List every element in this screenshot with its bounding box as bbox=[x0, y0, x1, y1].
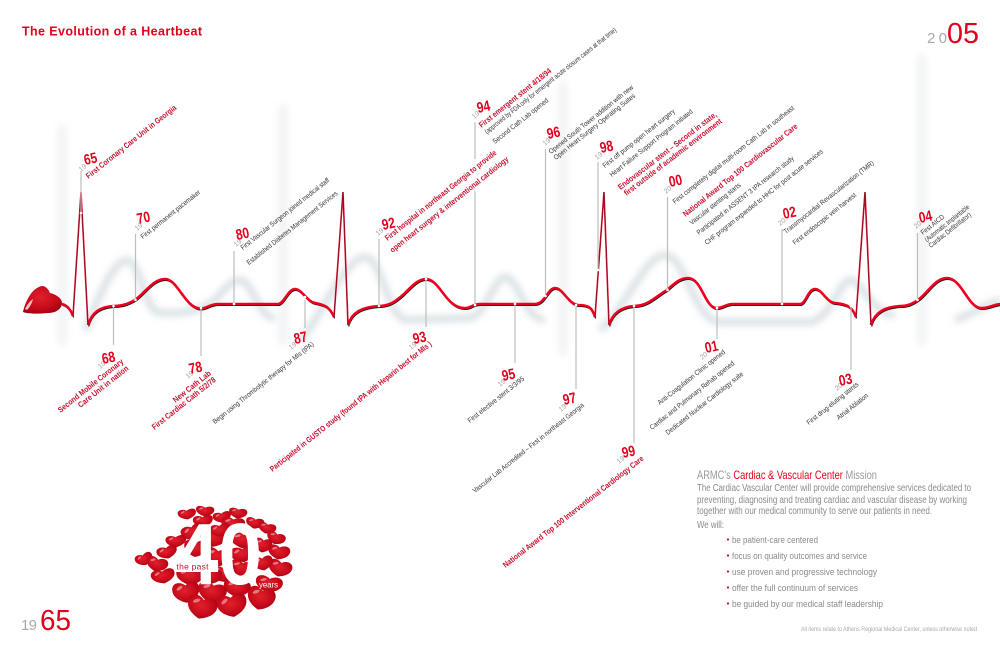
milestone 2000: Participated in ASSENT 3 tPA research study bbox=[696, 155, 796, 237]
milestone 2001: Anti-Coagulation Clinic opened bbox=[657, 349, 727, 407]
milestone 2003: 20 bbox=[834, 382, 844, 393]
milestone 1995: First elective stent 3/3/95 bbox=[467, 376, 526, 425]
milestone 1980: Established Diabetes Management Services bbox=[246, 190, 340, 267]
years label: years bbox=[259, 580, 278, 590]
milestone 1997: Vascular Lab Accredited – First in northeast Georgia bbox=[472, 402, 586, 495]
milestone 1995: 95 bbox=[500, 365, 517, 384]
milestone 1999: 19 bbox=[616, 455, 626, 466]
milestone 2004: (Automatic Implantable bbox=[924, 204, 971, 244]
milestone 1998: 19 bbox=[594, 151, 604, 162]
title: The Evolution of a Heartbeat bbox=[22, 24, 203, 38]
milestone 1999: 99 bbox=[620, 442, 637, 461]
milestone 1978: New Cath Lab bbox=[171, 369, 213, 405]
milestone 2001: Cardiac and Pulmonary Rehab opened bbox=[649, 360, 736, 432]
milestone 1993: 19 bbox=[408, 341, 418, 352]
milestone 2000: National Award Top 100 Cardiovascular Care bbox=[681, 122, 800, 219]
milestone 1994: First emergent stent 4/18/94 bbox=[477, 66, 554, 130]
commitments list: be patient-care centered bbox=[732, 535, 818, 546]
milestone 2000: Vascular stenting starts bbox=[689, 182, 743, 227]
milestone 2004: Cardiac Defibrillator) bbox=[928, 212, 973, 250]
milestone 1965: First Coronary Care Unit in Georgia bbox=[84, 103, 179, 181]
milestone 1994: (approved by FDA only for emergent acute closure cases at that time) bbox=[484, 27, 618, 136]
milestone 1994: Second Cath Lab opened bbox=[492, 97, 550, 146]
milestone 2003 bbox=[806, 306, 870, 427]
commitments list: focus on quality outcomes and service bbox=[732, 551, 867, 562]
milestone 1970: First permanent pacemaker bbox=[140, 189, 203, 241]
milestone 1994 bbox=[471, 27, 618, 304]
milestone 2004: First AICD bbox=[920, 214, 946, 237]
commitments list: offer the full continuum of services bbox=[732, 583, 858, 594]
milestone 1968: Care Unit in nation bbox=[76, 364, 130, 410]
milestone 2001: 20 bbox=[699, 351, 709, 362]
milestone 1970: 19 bbox=[134, 222, 144, 233]
milestone 1992: First hospital in northeast Georgia to provide bbox=[383, 148, 499, 243]
milestone 2003: Atrial Ablation bbox=[836, 393, 870, 422]
end year 2005 bbox=[927, 18, 979, 50]
milestone 2002: 02 bbox=[781, 203, 798, 222]
start year 1965: 65 bbox=[40, 605, 71, 637]
mission statement: together with our medical community to serve our patients in need. bbox=[697, 506, 932, 517]
milestone 2004 bbox=[913, 204, 973, 300]
milestone 2000: CHF program expanded to HHC for post acute services bbox=[704, 148, 825, 247]
milestone 2000: 20 bbox=[663, 185, 673, 196]
milestone 1987: Begin using Thrombolytic therapy for MIs (tPA) bbox=[212, 341, 316, 426]
milestone 2004: 20 bbox=[913, 220, 923, 231]
milestone 1987: 19 bbox=[288, 341, 298, 352]
mission panel bbox=[697, 468, 971, 610]
end year 2005: 05 bbox=[947, 18, 979, 50]
milestone 1996: Open Heart Surgery Operating Suites bbox=[553, 92, 637, 162]
number 40: 40 bbox=[175, 506, 262, 603]
milestone 1995 bbox=[467, 304, 526, 425]
milestone 1998: First off pump open heart surgery bbox=[602, 108, 677, 170]
milestone 1980: 80 bbox=[234, 224, 251, 243]
milestone 1993: Participated in GUSTO study (found tPA with Heparin best for MIs ) bbox=[268, 339, 434, 474]
milestone 1980: 19 bbox=[233, 238, 243, 249]
graphic: the past 40 years hearts cluster bbox=[134, 505, 294, 622]
milestone 1993: 93 bbox=[411, 328, 428, 347]
milestone 2001: 01 bbox=[703, 337, 720, 356]
mission statement bbox=[697, 483, 971, 531]
milestone 1992: 19 bbox=[375, 227, 385, 238]
start year 1965: 19 bbox=[21, 617, 37, 634]
milestone 1992: open heart surgery & interventional cardiology bbox=[388, 154, 511, 255]
milestone 2001: Dedicated Nuclear Cardiology suite bbox=[665, 371, 745, 437]
milestone 1970 bbox=[134, 189, 203, 300]
milestone 1997: 19 bbox=[558, 403, 568, 414]
milestone 1968: Second Mobile Coronary bbox=[56, 357, 126, 415]
milestone 1994: 94 bbox=[475, 97, 492, 116]
milestone 1978: 19 bbox=[185, 370, 195, 381]
milestone 1978: First Cardiac Cath 5/2/78 bbox=[150, 375, 218, 432]
milestone 2004: 04 bbox=[917, 207, 934, 226]
commitments list: be guided by our medical staff leadership bbox=[732, 599, 883, 610]
milestone 1997: 97 bbox=[561, 389, 578, 408]
milestone 1970: 70 bbox=[135, 208, 152, 227]
milestone 2000: 00 bbox=[667, 171, 684, 190]
mission heading: ARMC's Cardiac & Vascular Center Mission bbox=[697, 468, 877, 482]
milestone 1965 bbox=[78, 103, 179, 212]
milestone 2000: First completely digital multi-room Cath Lab in southeast bbox=[672, 105, 796, 206]
milestone 1998: Heart Failure Support Program initiated bbox=[609, 108, 695, 179]
milestone 1987: 87 bbox=[292, 328, 309, 347]
milestone 1980: First Vascular Surgeon joined medical staff bbox=[240, 177, 331, 252]
commitments list bbox=[727, 535, 883, 610]
milestone 1999 bbox=[501, 306, 646, 570]
milestone 2002: First endoscopic vein harvest bbox=[792, 192, 858, 247]
milestone 1995: 19 bbox=[497, 378, 507, 389]
milestone 1998: Endovascular stent – Second in state, bbox=[616, 110, 719, 192]
milestone 1992 bbox=[375, 148, 511, 306]
milestone 1987 bbox=[212, 300, 316, 426]
milestone 1980 bbox=[233, 177, 340, 304]
milestone 2000 bbox=[663, 105, 825, 290]
background ghost heartbeat bbox=[62, 55, 1000, 355]
milestone 2002: 20 bbox=[777, 217, 787, 228]
junction dots on the line bbox=[80, 212, 919, 309]
milestone 2002 bbox=[777, 160, 876, 304]
milestone 1998: 98 bbox=[598, 137, 615, 156]
milestone 1996: 19 bbox=[542, 137, 552, 148]
commitments list: use proven and progressive technology bbox=[732, 567, 877, 578]
milestone 2002: Transmyocardial Revascularization (TMR) bbox=[783, 160, 876, 236]
milestone 1996: Opened South Tower addition with new bbox=[548, 84, 636, 156]
milestone 1968: 68 bbox=[100, 348, 117, 367]
milestone 2003: First drug-eluting stents bbox=[806, 381, 861, 427]
milestone 1998: first outside of academic environment bbox=[622, 117, 724, 198]
milestone 1978 bbox=[150, 308, 218, 432]
milestone 1968: 19 bbox=[97, 360, 107, 371]
milestone 1998 bbox=[594, 108, 724, 270]
milestone 1994: 19 bbox=[471, 110, 481, 121]
milestone 1997 bbox=[472, 305, 586, 495]
milestone 1996 bbox=[542, 84, 637, 295]
milestone 1965: 19 bbox=[78, 163, 88, 174]
milestone 1968 bbox=[56, 306, 130, 415]
the past label bbox=[174, 560, 218, 572]
milestone 1996: 96 bbox=[545, 123, 562, 142]
milestone 1992: 92 bbox=[380, 214, 397, 233]
icon: glass heart at start of line bbox=[23, 286, 62, 314]
milestone 2001 bbox=[649, 308, 745, 437]
mission statement: We will: bbox=[697, 520, 724, 531]
start year 1965 bbox=[21, 605, 71, 637]
milestone 2003: 03 bbox=[837, 370, 854, 389]
milestone 1965: 65 bbox=[82, 149, 99, 168]
end year 2005: 20 bbox=[927, 30, 947, 47]
the past label: the past bbox=[176, 562, 209, 572]
milestone 1978: 78 bbox=[187, 358, 204, 377]
heartbeat line bbox=[62, 192, 1000, 326]
milestone 1999: National Award Top 100 Interventional Cardiology Care bbox=[501, 454, 646, 570]
